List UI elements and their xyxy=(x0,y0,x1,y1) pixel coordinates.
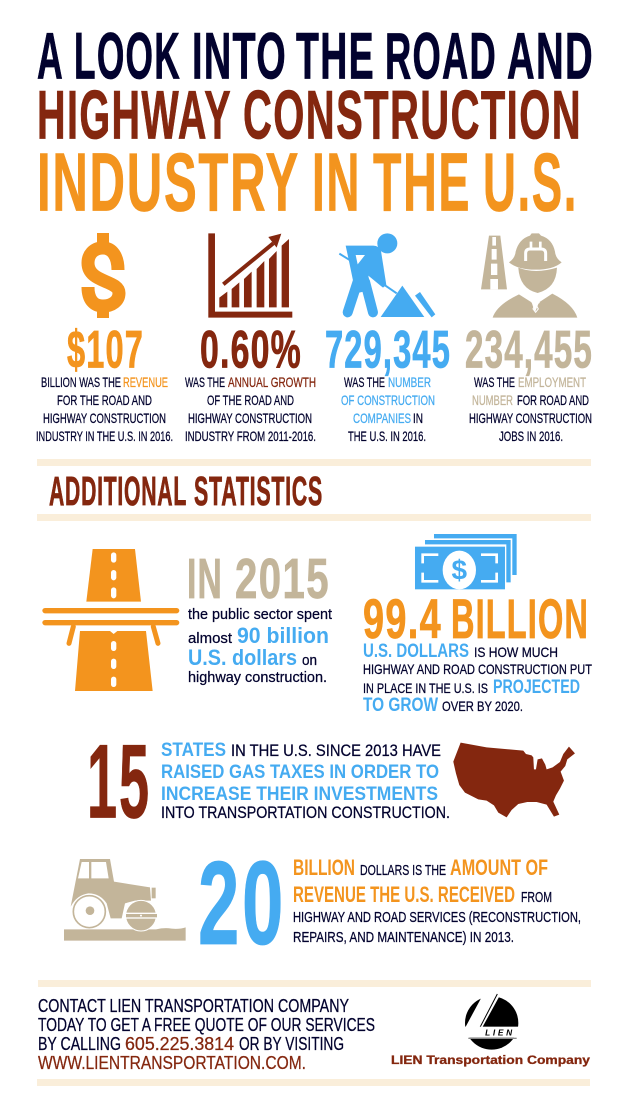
contact text: BY CALLING xyxy=(38,1034,121,1054)
description: REVENUE THE U.S. RECEIVED xyxy=(293,882,515,907)
icon: map of the united states xyxy=(453,743,575,817)
description xyxy=(161,740,450,822)
description: DOLLARS IS THE xyxy=(360,862,446,879)
panel: 15 states gas taxes xyxy=(87,724,575,840)
description: IS HOW MUCH xyxy=(474,644,558,660)
description: INCREASE THEIR INVESTMENTS xyxy=(161,784,438,805)
title: INTO xyxy=(192,18,287,92)
contact text: TODAY TO GET A FREE QUOTE OF OUR SERVICES xyxy=(38,1015,375,1035)
description: OVER BY 2020. xyxy=(442,698,523,714)
title: HIGHWAY xyxy=(37,76,232,154)
description: BILLION WAS THE xyxy=(41,374,121,390)
heading: additional statistics: ADDITIONAL xyxy=(49,468,187,514)
description: STATES xyxy=(161,740,226,761)
title: A xyxy=(37,18,64,92)
description xyxy=(188,606,333,686)
icon: road and hard hat worker xyxy=(481,233,577,318)
value: 15: 15 xyxy=(87,724,151,840)
description: HIGHWAY CONSTRUCTION xyxy=(188,410,312,426)
title: LOOK xyxy=(74,18,181,92)
value: 729,345: 729,345 xyxy=(325,320,451,380)
description: INDUSTRY FROM 2011-2016. xyxy=(185,428,316,444)
icon: dollar sign xyxy=(88,233,119,318)
description: FOR ROAD AND xyxy=(517,392,589,408)
description: NUMBER xyxy=(388,374,431,390)
icon: stack of banknotes: $ xyxy=(452,554,468,585)
logo mark: LIEN xyxy=(485,1028,515,1038)
panel: employment stat xyxy=(465,233,593,444)
description: THE U.S. IN 2016. xyxy=(348,428,426,444)
description: IN THE U.S. SINCE 2013 HAVE xyxy=(231,741,441,760)
description: TO GROW xyxy=(363,695,438,716)
panel: revenue stat xyxy=(36,233,173,444)
heading: in 2015: IN xyxy=(187,547,223,611)
title: INDUSTRY xyxy=(37,136,300,228)
description: 90 billion xyxy=(237,623,329,648)
description xyxy=(293,855,581,946)
description: PROJECTED xyxy=(493,677,580,698)
description: INDUSTRY IN THE U.S. IN 2016. xyxy=(36,428,173,444)
description: JOBS IN 2016. xyxy=(499,428,563,444)
description: ANNUAL GROWTH xyxy=(228,374,316,390)
value: 20: 20 xyxy=(198,837,286,970)
description: highway construction. xyxy=(188,669,327,686)
title: ROAD xyxy=(385,18,497,92)
description: on xyxy=(302,652,317,669)
contact text: OR BY VISITING xyxy=(239,1034,344,1054)
icon: highway overpass xyxy=(42,549,179,691)
description: FOR THE ROAD AND xyxy=(57,392,152,408)
description: AMOUNT OF xyxy=(450,855,548,880)
panel: 20 billion revenue xyxy=(64,837,581,970)
contact text: WWW.LIENTRANSPORTATION.COM. xyxy=(38,1053,306,1073)
title: IN xyxy=(312,136,361,228)
panel: 2015 public spending xyxy=(42,547,333,691)
heading: in 2015 xyxy=(187,547,330,611)
value: 99.4 billion xyxy=(363,587,589,650)
title: THE xyxy=(296,18,375,92)
description: INTO TRANSPORTATION CONSTRUCTION. xyxy=(161,803,450,822)
panel: construction companies stat xyxy=(325,233,451,444)
panel: 99.4 billion projection xyxy=(363,534,592,716)
logo wordmark: LIEN Transportation Company xyxy=(391,1055,591,1067)
description: OF THE ROAD AND xyxy=(207,392,294,408)
description: the public sector spent xyxy=(188,606,333,623)
description: U.S. dollars xyxy=(188,645,297,670)
icon: rising bar chart xyxy=(208,233,292,318)
description: WAS THE xyxy=(185,374,225,390)
title xyxy=(37,18,594,228)
heading: in 2015: 2015 xyxy=(235,547,330,611)
description: RAISED GAS TAXES IN ORDER TO xyxy=(161,762,439,783)
value: $107: $107 xyxy=(67,320,144,380)
description: NUMBER xyxy=(472,392,513,408)
logo: lien transportation company xyxy=(391,994,591,1067)
description: REVENUE xyxy=(123,374,168,390)
description xyxy=(363,641,592,716)
description: OF CONSTRUCTION xyxy=(341,392,435,408)
description xyxy=(469,374,592,444)
description: WAS THE xyxy=(474,374,515,390)
icon: worker shoveling xyxy=(339,233,435,317)
description: HIGHWAY CONSTRUCTION xyxy=(43,410,166,426)
panel: annual growth stat xyxy=(185,233,316,444)
icon: road roller xyxy=(64,859,186,941)
heading: additional statistics: STATISTICS xyxy=(194,468,323,514)
description: REPAIRS, AND MAINTENANCE) IN 2013. xyxy=(293,929,514,946)
contact text: 605.225.3814 xyxy=(125,1034,234,1054)
description: BILLION xyxy=(293,855,355,880)
description: COMPANIES xyxy=(353,410,411,426)
value: 99.4 billion: 99.4 xyxy=(363,587,442,650)
description: FROM xyxy=(521,889,552,906)
contact text: CONTACT LIEN TRANSPORTATION COMPANY xyxy=(38,996,349,1016)
description xyxy=(36,374,173,444)
value: 0.60%: 0.60% xyxy=(200,320,302,380)
description: IN xyxy=(413,410,423,426)
title: THE xyxy=(373,136,471,228)
logo mark xyxy=(460,994,523,1050)
description xyxy=(185,374,316,444)
description: IN PLACE IN THE U.S. IS xyxy=(363,680,488,696)
description xyxy=(341,374,435,444)
description: WAS THE xyxy=(344,374,385,390)
description: almost xyxy=(188,630,233,647)
contact text xyxy=(38,996,375,1073)
description: EMPLOYMENT xyxy=(518,374,586,390)
icon: stack of banknotes xyxy=(415,534,517,589)
description: U.S. DOLLARS xyxy=(363,641,469,662)
